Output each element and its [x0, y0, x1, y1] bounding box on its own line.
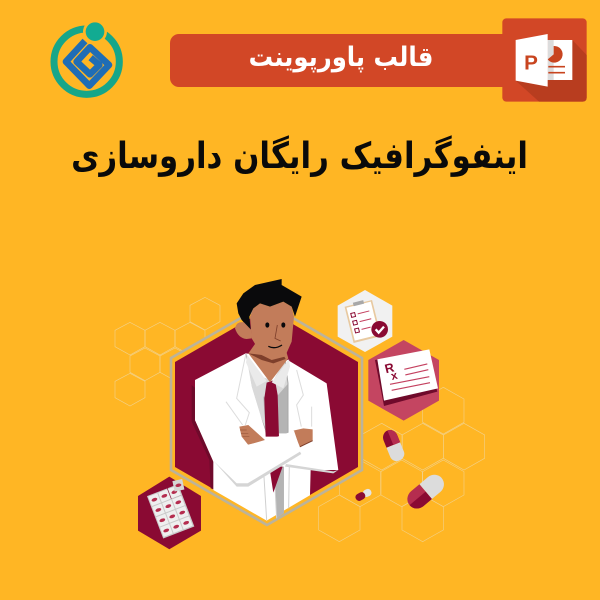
icon: PowerPoint: P — [524, 51, 538, 74]
pill: medium — [381, 428, 406, 463]
pills — [354, 428, 448, 513]
banner label: قالب پاورپوینت — [249, 42, 433, 73]
logo — [54, 20, 119, 94]
pill: large — [403, 471, 448, 513]
tie — [264, 380, 279, 437]
badge: checklist — [338, 290, 392, 352]
doctor — [192, 279, 338, 521]
neck — [248, 342, 288, 382]
pill: small — [354, 488, 373, 502]
title: اینفوگرافیک رایگان داروسازی — [71, 135, 528, 178]
icon: PowerPoint — [502, 18, 587, 102]
badge: blister pack — [138, 477, 201, 549]
ear — [235, 322, 252, 339]
main hexagon with doctor — [171, 279, 362, 525]
hexagon outlines left — [115, 297, 220, 406]
badge: prescription: x — [390, 370, 400, 383]
hexagon outlines right — [319, 387, 485, 542]
blister sheet — [147, 484, 194, 538]
face — [250, 302, 294, 360]
shirt — [246, 354, 289, 433]
hair — [237, 279, 302, 330]
badge: prescription — [368, 340, 439, 421]
badge: prescription: R — [383, 360, 396, 376]
coat and body — [192, 353, 338, 521]
header banner — [170, 34, 515, 87]
lower shirt — [274, 467, 284, 518]
lapels — [237, 355, 265, 430]
hands — [239, 425, 265, 445]
collar — [246, 355, 267, 387]
eyes — [265, 322, 269, 328]
clipboard — [344, 298, 381, 343]
head — [235, 279, 302, 388]
crossed arms — [195, 410, 301, 485]
